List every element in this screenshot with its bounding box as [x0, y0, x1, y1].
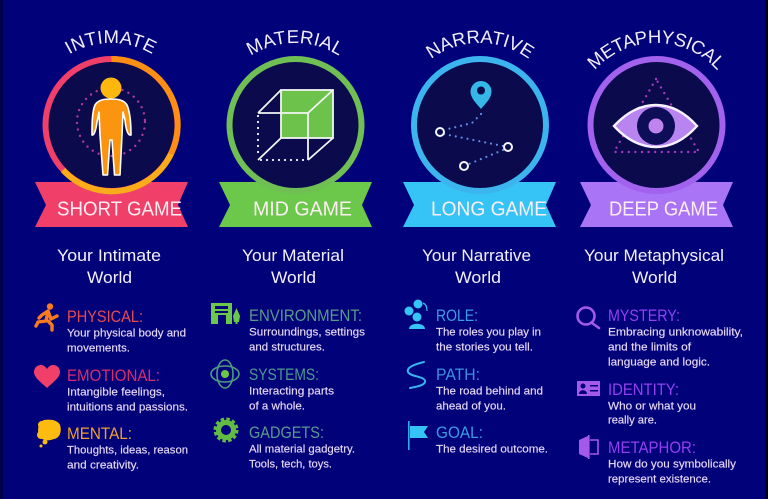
item: goal — [436, 424, 548, 456]
item: gadgets — [249, 424, 355, 470]
panel: metaphysical — [576, 30, 743, 486]
item: mental: and creativity. — [67, 460, 139, 472]
icon: metaphor mirror — [579, 435, 598, 459]
item: environment: and structures. — [249, 342, 325, 354]
icon: person with dotted aura — [77, 78, 145, 175]
title: your material world — [242, 246, 344, 287]
item: goal: GOAL: — [436, 424, 483, 442]
icon: magnifier — [578, 308, 599, 328]
item: identity: IDENTITY: — [608, 381, 679, 399]
icon: runner — [36, 303, 57, 330]
icon: thought bubble — [37, 420, 61, 448]
item: environment: Surroundings, settings — [249, 326, 366, 338]
item: identity — [608, 381, 696, 426]
item: emotional: intuitions and passions. — [67, 402, 188, 414]
ribbon: mid game — [219, 182, 372, 227]
item: systems: of a whole. — [249, 400, 305, 412]
item: path: PATH: — [436, 366, 480, 384]
title: your narrative world: World — [455, 268, 501, 287]
label: mid game: MID GAME — [253, 198, 352, 220]
icon: atom — [211, 360, 239, 388]
title: your metaphysical world — [584, 246, 724, 287]
item: identity: Who or what you — [608, 400, 696, 412]
title: your intimate world — [57, 246, 161, 287]
item: mystery: language and logic. — [608, 356, 710, 368]
panel: narrative — [403, 30, 556, 456]
panel: material — [210, 30, 372, 470]
item: mystery — [608, 307, 743, 368]
item: environment: ENVIRONMENT: — [249, 307, 362, 325]
panel: intimate — [34, 30, 188, 472]
title: your narrative world — [422, 246, 531, 287]
badge: narrative circle — [414, 59, 546, 191]
icon: building and tree — [211, 303, 240, 324]
item: emotional: Intangible feelings, — [67, 386, 165, 398]
item: environment — [249, 307, 366, 354]
title: your material world: Your Material — [242, 246, 344, 265]
item: physical: Your physical body and — [67, 328, 186, 340]
item: path: ahead of you. — [436, 400, 506, 412]
icon: wireframe cube — [258, 90, 333, 160]
heading: material arc: MATERIAL — [246, 30, 340, 56]
item: identity: really are. — [608, 414, 657, 426]
label: deep game: DEEP GAME — [609, 198, 718, 220]
item: metaphor: How do you symbolically — [608, 458, 737, 470]
item: emotional — [67, 367, 188, 414]
title: your metaphysical world: Your Metaphysical — [584, 246, 724, 265]
item: systems: Interacting parts — [249, 386, 335, 398]
item: path: The road behind and — [436, 386, 543, 398]
icon: heart — [34, 365, 60, 388]
ribbon: short game — [35, 182, 188, 227]
item: gadgets: Tools, tech, toys. — [249, 458, 332, 470]
item: mystery: and the limits of — [608, 342, 692, 354]
item: metaphor — [608, 439, 737, 486]
ribbon: deep game — [580, 182, 733, 227]
icon: map pin and route — [436, 81, 512, 170]
icon: role figures — [404, 300, 427, 329]
icon: id card — [577, 381, 600, 396]
item: mental: Thoughts, ideas, reason — [67, 444, 188, 456]
icon: eye in triangle — [614, 79, 699, 152]
title: your material world: World — [271, 268, 316, 287]
title: your metaphysical world: World — [632, 268, 677, 287]
label: long game: LONG GAME — [431, 198, 547, 220]
icon: flag — [408, 421, 428, 450]
label: short game: SHORT GAME — [57, 198, 182, 220]
heading: narrative arc: NARRATIVE — [426, 30, 535, 58]
badge: material circle — [230, 59, 362, 191]
item: mental — [67, 425, 188, 472]
item: systems — [249, 366, 335, 412]
badge: intimate circle — [46, 59, 178, 191]
title: your narrative world: Your Narrative — [422, 246, 531, 265]
heading: intimate arc: INTIMATE — [64, 30, 157, 54]
item: metaphor: METAPHOR: — [608, 439, 696, 457]
badge: metaphysical circle — [590, 59, 722, 191]
heading: metaphysical arc: METAPHYSICAL — [587, 30, 722, 70]
icon: gear — [215, 419, 237, 441]
item: mystery: MYSTERY: — [608, 307, 680, 325]
item: path — [436, 366, 543, 412]
item: systems: SYSTEMS: — [249, 366, 319, 384]
item: physical: PHYSICAL: — [67, 308, 143, 326]
item: mental: MENTAL: — [67, 425, 132, 443]
title: your intimate world: World — [87, 268, 132, 287]
item: goal: The desired outcome. — [436, 444, 548, 456]
item: emotional: EMOTIONAL: — [67, 367, 160, 385]
item: metaphor: represent existence. — [608, 474, 711, 486]
item: gadgets: GADGETS: — [249, 424, 324, 442]
item: role — [436, 307, 541, 354]
item: role: The roles you play in — [436, 326, 541, 338]
item: mystery: Embracing unknowability, — [608, 326, 743, 338]
item: gadgets: All material gadgetry. — [249, 444, 355, 456]
item: role: ROLE: — [436, 307, 478, 325]
title: your intimate world: Your Intimate — [57, 246, 161, 265]
item: physical: movements. — [67, 342, 130, 354]
item: physical — [67, 308, 186, 354]
icon: s-shaped path — [408, 362, 425, 388]
ribbon: long game — [403, 182, 556, 227]
item: role: the stories you tell. — [436, 342, 533, 354]
